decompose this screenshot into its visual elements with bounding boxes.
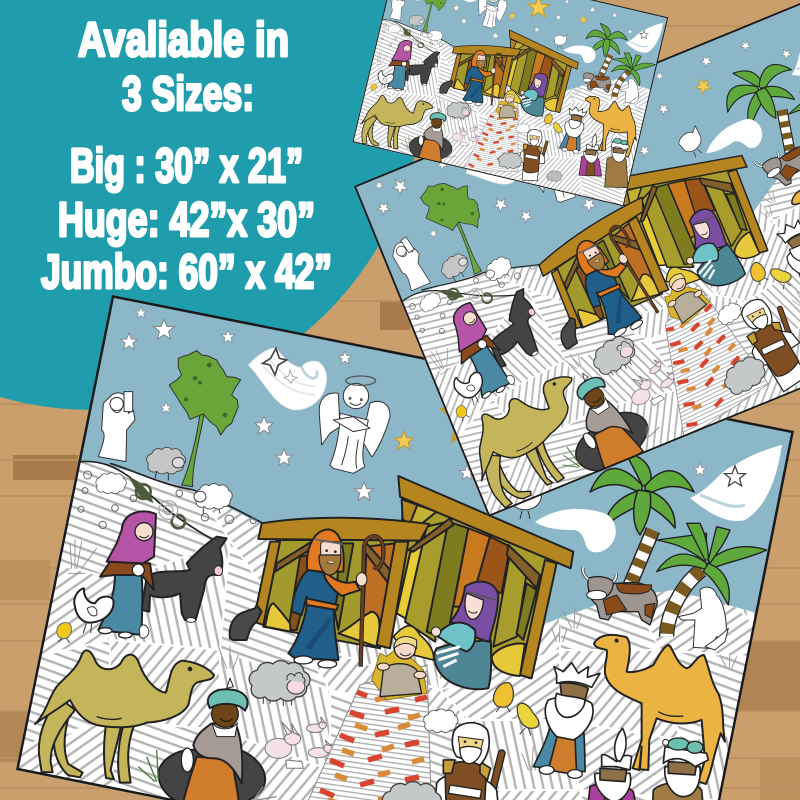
carpet: [295, 665, 432, 800]
title and sizes text: Jumbo: 60” x 42”: [41, 246, 332, 299]
ground pattern: [0, 440, 800, 800]
woman with magenta hood: [98, 511, 156, 638]
title and sizes text: [41, 14, 332, 299]
swirl cloud right: [690, 445, 782, 521]
comet swirl with star: [248, 348, 327, 410]
teal circle panel: [0, 0, 424, 410]
title and sizes text: Big : 30” x 21”: [70, 140, 303, 193]
joseph with staff: [288, 529, 383, 668]
yellow stars: [394, 390, 592, 453]
ox: [583, 567, 657, 625]
chicks: [493, 683, 539, 735]
shepherd on hill: [98, 392, 135, 462]
poster: small copy: [344, 0, 673, 217]
hen on roof: [511, 483, 543, 519]
poster: medium copy: [285, 0, 800, 622]
small white chick: [139, 625, 149, 638]
hill decorations: [78, 461, 263, 540]
stars: [120, 307, 707, 535]
hay right of mary: [492, 644, 525, 676]
king with magenta robe: [585, 728, 642, 800]
mary: [431, 582, 498, 689]
cat: [230, 605, 262, 640]
seated line-art figure: [678, 587, 728, 650]
barn front shed: [253, 518, 429, 648]
donkey: [142, 537, 227, 622]
palm tree one: [590, 452, 694, 585]
king with teal goggles: [650, 738, 708, 800]
grass tuft: [68, 540, 238, 668]
baby in manger: [372, 626, 434, 700]
grass near magus: [138, 750, 277, 800]
rabbits: [265, 717, 333, 768]
poster border: [16, 295, 794, 800]
hen: [74, 588, 114, 633]
sheep group on hill: [96, 447, 232, 513]
seated magus: [158, 678, 265, 800]
shepherd with vest: [435, 723, 502, 800]
tree: [169, 351, 241, 487]
gray sheep at bottom: [382, 782, 442, 800]
white sheep by carpet: [424, 709, 458, 732]
golden camel: [594, 635, 725, 784]
king with crown and teal orange robe: [533, 663, 600, 778]
angel: [319, 376, 390, 473]
title and sizes text: Avaliable in: [78, 14, 289, 67]
title and sizes text: Huge: 42”x 30”: [58, 194, 315, 247]
sky: [16, 295, 794, 800]
yellow chick: [57, 623, 71, 643]
gray sheep: [249, 661, 310, 706]
olive camel: [35, 650, 214, 783]
swirl cloud left: [535, 509, 616, 552]
grass tufts right: [522, 607, 737, 770]
barn back shed: [397, 476, 573, 678]
title and sizes text: 3 Sizes:: [122, 68, 254, 121]
poster: large nativity scene: [0, 295, 800, 800]
palm tree two: [657, 523, 767, 637]
